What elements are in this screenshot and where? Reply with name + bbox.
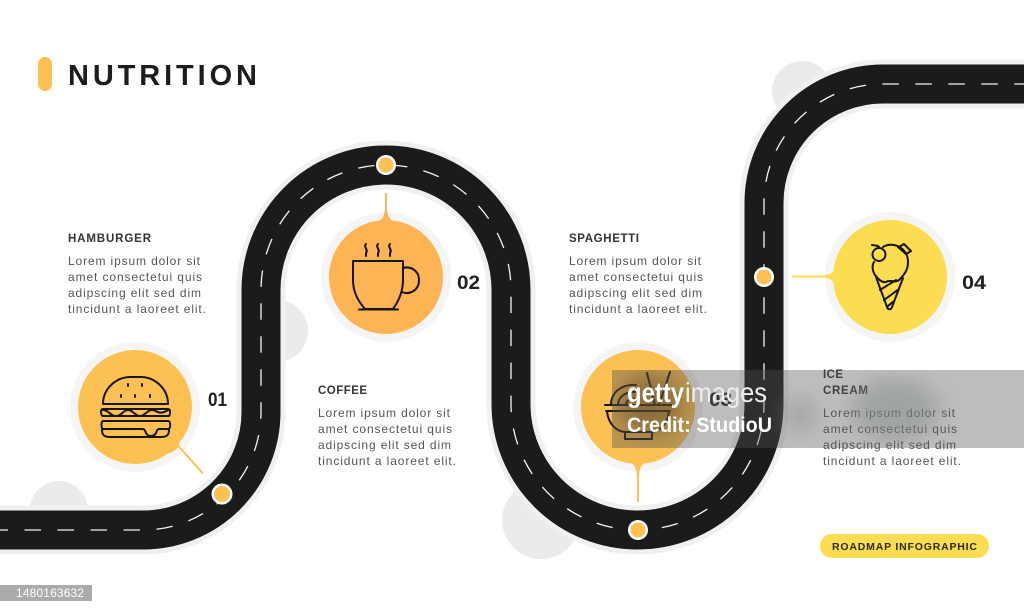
road marker 04	[754, 267, 774, 287]
text block: spaghetti: Lorem ipsum dolor sit	[569, 254, 702, 268]
number 04: 04	[962, 273, 986, 294]
connector 01	[167, 441, 204, 474]
milestone 02: coffee	[321, 155, 480, 342]
text block: ice cream: ICE	[823, 369, 843, 381]
connector 02	[378, 193, 394, 222]
title accent bar	[38, 57, 52, 91]
icon: ice cream cone	[872, 244, 911, 309]
milestone 04: ice cream	[754, 212, 986, 342]
halo 02	[321, 212, 451, 342]
number 02: 02	[457, 273, 480, 294]
text block: hamburger: tincidunt a laoreet elit.	[68, 302, 206, 316]
milestone 01: hamburger	[70, 342, 232, 504]
watermark band	[612, 370, 1024, 448]
icon: hamburger	[101, 377, 170, 437]
connector 04	[792, 269, 835, 285]
badge: roadmap infographic	[820, 534, 989, 558]
text block: ice cream	[823, 369, 961, 468]
text block: spaghetti: SPAGHETTI	[569, 233, 639, 245]
text block: spaghetti: amet consectetui quis	[569, 270, 703, 284]
text block: spaghetti: adipscing elit sed dim	[569, 286, 702, 300]
text block: ice cream: amet consectetui quis	[823, 422, 957, 436]
connector 03	[630, 462, 646, 502]
halo 01	[70, 342, 200, 472]
text block: hamburger	[68, 233, 206, 316]
text block: ice cream: adipscing elit sed dim	[823, 438, 956, 452]
halo 04	[825, 212, 955, 342]
watermark logo: getty: getty	[627, 377, 684, 408]
text block: coffee: amet consectetui quis	[318, 422, 452, 436]
text block: coffee: tincidunt a laoreet elit.	[318, 454, 456, 468]
text block: coffee: COFFEE	[318, 385, 367, 397]
icon: noodle bowl	[605, 372, 671, 439]
text block: ice cream: tincidunt a laoreet elit.	[823, 454, 961, 468]
halo 03	[573, 342, 703, 472]
circle 02	[329, 220, 443, 334]
text block: hamburger: Lorem ipsum dolor sit	[68, 254, 201, 268]
image id tag	[0, 585, 92, 601]
image id tag: 1480163632	[16, 586, 84, 600]
winding road	[0, 84, 1024, 530]
road marker 01	[212, 484, 232, 504]
milestone 03: spaghetti	[573, 342, 732, 540]
title: NUTRITION	[68, 60, 257, 92]
watermark credit text: Credit: StudioU	[627, 414, 772, 437]
number 01: 01	[208, 390, 227, 411]
circle 04	[833, 220, 947, 334]
text block: hamburger: amet consectetui quis	[68, 270, 202, 284]
road marker 03	[628, 520, 648, 540]
text block: coffee	[318, 385, 456, 468]
text block: coffee: adipscing elit sed dim	[318, 438, 451, 452]
text block: ice cream: CREAM	[823, 385, 868, 397]
text block: spaghetti	[569, 233, 707, 316]
text block: coffee: Lorem ipsum dolor sit	[318, 406, 451, 420]
number 03: 03	[709, 390, 732, 411]
badge: roadmap infographic: ROADMAP INFOGRAPHIC	[832, 541, 977, 553]
text block: hamburger: adipscing elit sed dim	[68, 286, 201, 300]
decorative grey circles	[30, 61, 832, 559]
text block: hamburger: HAMBURGER	[68, 233, 152, 245]
text block: ice cream: Lorem ipsum dolor sit	[823, 406, 956, 420]
text block: spaghetti: tincidunt a laoreet elit.	[569, 302, 707, 316]
circle 03	[581, 350, 695, 464]
circle 01	[78, 350, 192, 464]
watermark logo: images: images	[685, 377, 767, 408]
icon: coffee cup	[353, 244, 419, 310]
road marker 02	[376, 155, 396, 175]
